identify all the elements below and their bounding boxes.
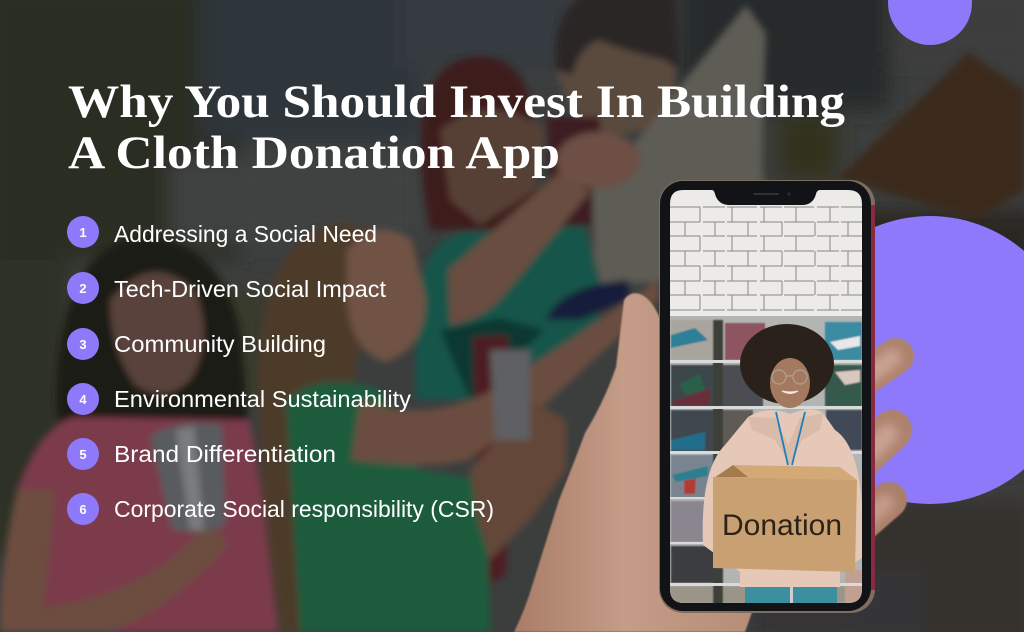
decorative circle: top right <box>888 0 972 45</box>
item 1 <box>67 216 377 248</box>
decorative circle: right <box>786 216 1024 504</box>
list of reasons <box>67 216 494 525</box>
title <box>68 76 846 179</box>
item 6: 6 <box>79 502 87 517</box>
item 3 <box>67 328 326 360</box>
item 6: Corporate Social responsibility (CSR) <box>114 496 494 522</box>
brick wall <box>670 207 862 310</box>
fingers <box>858 356 896 527</box>
item 4: Environmental Sustainability <box>114 386 412 412</box>
title: Why You Should Invest In Building <box>68 76 846 128</box>
jeans <box>745 587 837 603</box>
item 3: Community Building <box>114 331 326 357</box>
face <box>770 358 810 408</box>
item 4: 4 <box>79 392 87 407</box>
cloth held by man <box>592 5 770 283</box>
hand holding phone <box>514 293 896 632</box>
man <box>556 0 677 135</box>
item 5 <box>67 438 336 470</box>
item 3: 3 <box>79 337 87 352</box>
item 2: Tech-Driven Social Impact <box>114 276 387 302</box>
can left <box>150 423 226 532</box>
item 2 <box>67 272 387 304</box>
lanyard <box>776 412 805 465</box>
phone body <box>659 180 875 613</box>
finger highlights <box>868 358 892 518</box>
right girl hair <box>258 223 380 632</box>
hoodie <box>703 409 862 587</box>
phone <box>659 180 875 613</box>
box top right <box>838 52 1024 220</box>
thumb and palm <box>514 293 760 632</box>
storage shelves <box>670 316 862 603</box>
item 1: 1 <box>79 225 87 240</box>
phone screen photo <box>670 190 862 605</box>
woman <box>421 56 540 230</box>
item 4 <box>67 383 412 415</box>
item 1: Addressing a Social Need <box>114 221 377 247</box>
item 5: Brand Differentiation <box>114 441 336 467</box>
speaker and camera notch details <box>753 192 791 196</box>
right girl arm <box>351 280 659 465</box>
donation box <box>713 465 857 572</box>
item 5: 5 <box>79 447 87 462</box>
person <box>703 324 862 603</box>
title: A Cloth Donation App <box>68 127 560 179</box>
glasses <box>772 370 807 384</box>
hair <box>740 324 834 404</box>
item 2: 2 <box>79 281 87 296</box>
right girl shirt <box>286 382 490 632</box>
smile <box>782 391 798 394</box>
red and navy clothing <box>473 335 520 590</box>
handwritten label: Donation <box>722 509 842 542</box>
left girl <box>56 237 250 440</box>
